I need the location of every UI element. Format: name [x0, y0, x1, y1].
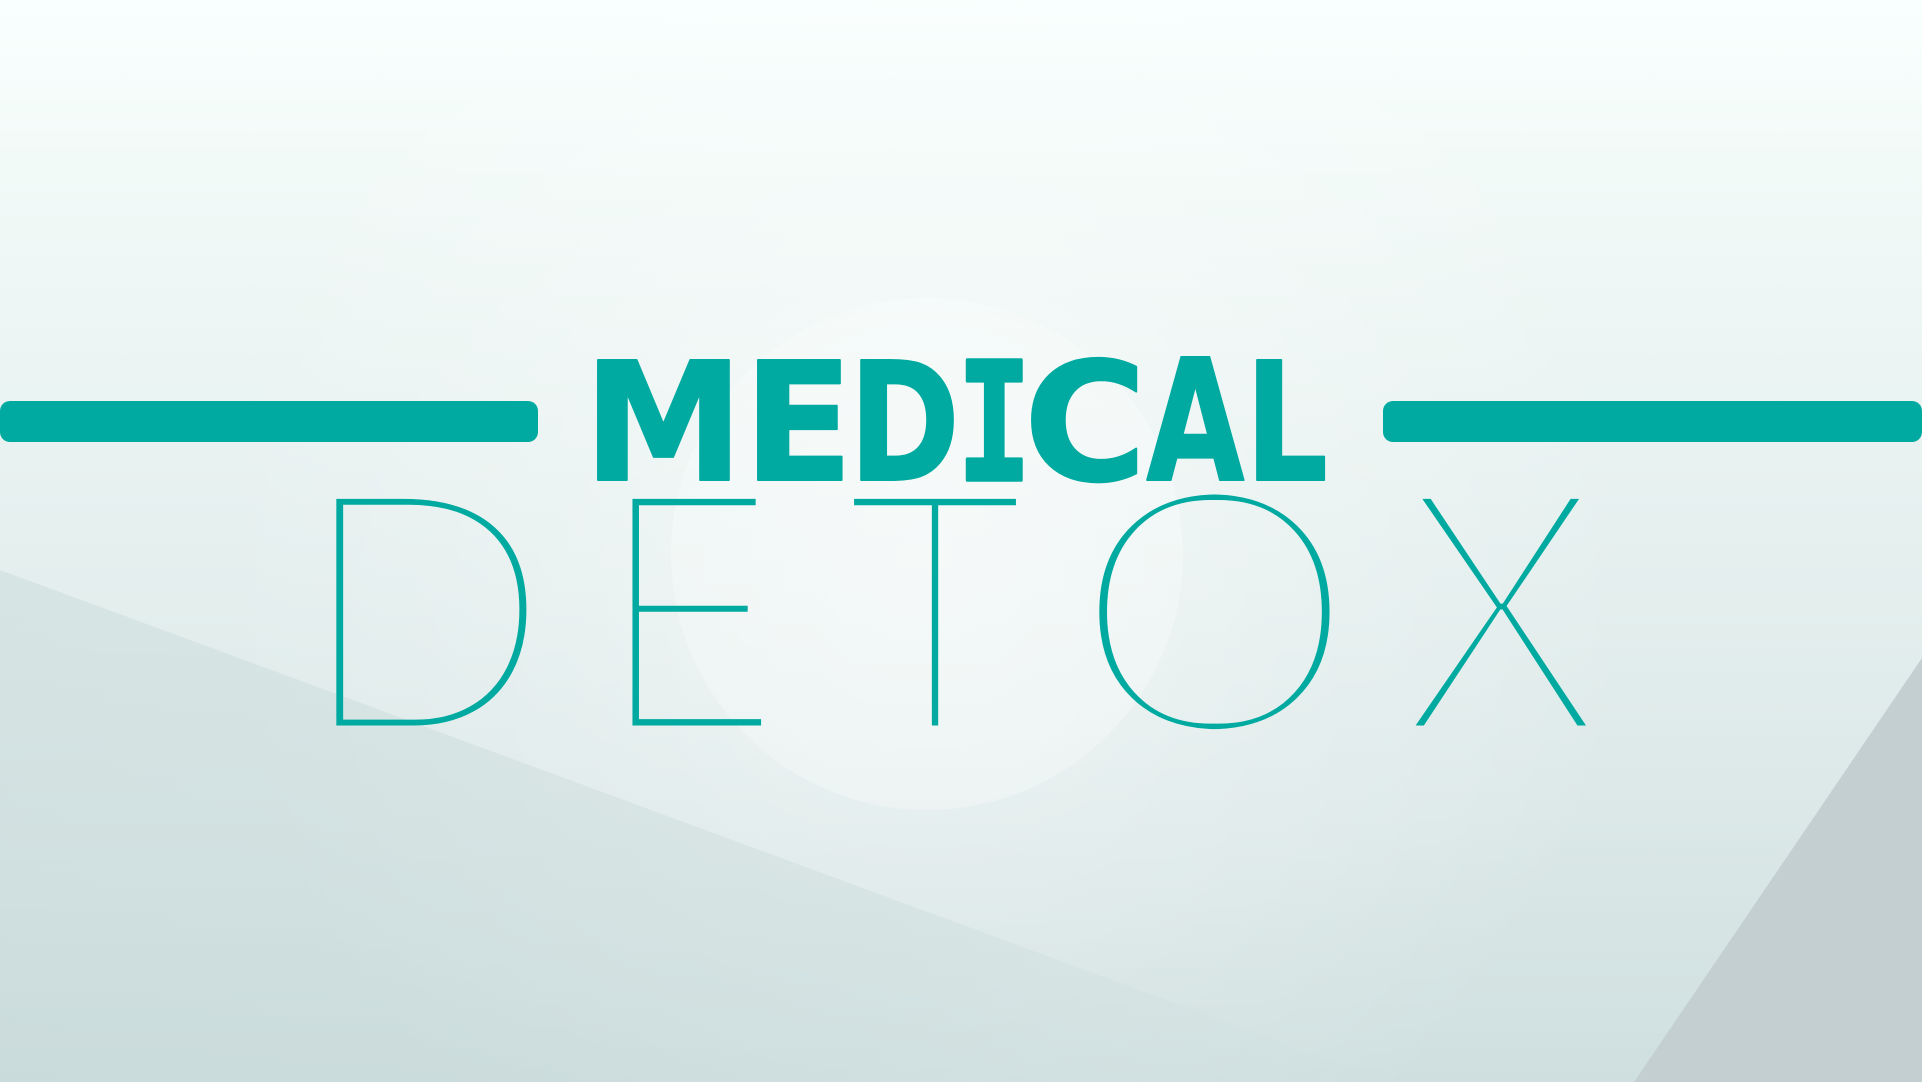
heading: DETOX: O: [1061, 422, 1368, 816]
heading: MEDICAL: L: [1245, 327, 1328, 519]
background wedge: lower left: [0, 570, 1389, 1082]
right bar: [1383, 401, 1922, 442]
heading: DETOX: T: [835, 411, 1036, 813]
heading: MEDICAL: [583, 324, 1328, 521]
heading: MEDICAL: M: [583, 328, 744, 519]
left bar: [0, 401, 538, 442]
heading: MEDICAL: D: [849, 329, 960, 519]
heading: DETOX: [292, 410, 1613, 816]
heading: DETOX: E: [601, 410, 782, 813]
heading: DETOX: D: [292, 411, 558, 813]
heading: DETOX: X: [1388, 411, 1613, 813]
heading: MEDICAL: A: [1146, 324, 1244, 521]
background wedge: lower right: [1634, 658, 1922, 1082]
heading: MEDICAL: I: [957, 328, 1032, 519]
heading: MEDICAL: C: [1024, 329, 1147, 520]
background circle: [671, 298, 1183, 810]
heading: MEDICAL: E: [743, 328, 853, 519]
